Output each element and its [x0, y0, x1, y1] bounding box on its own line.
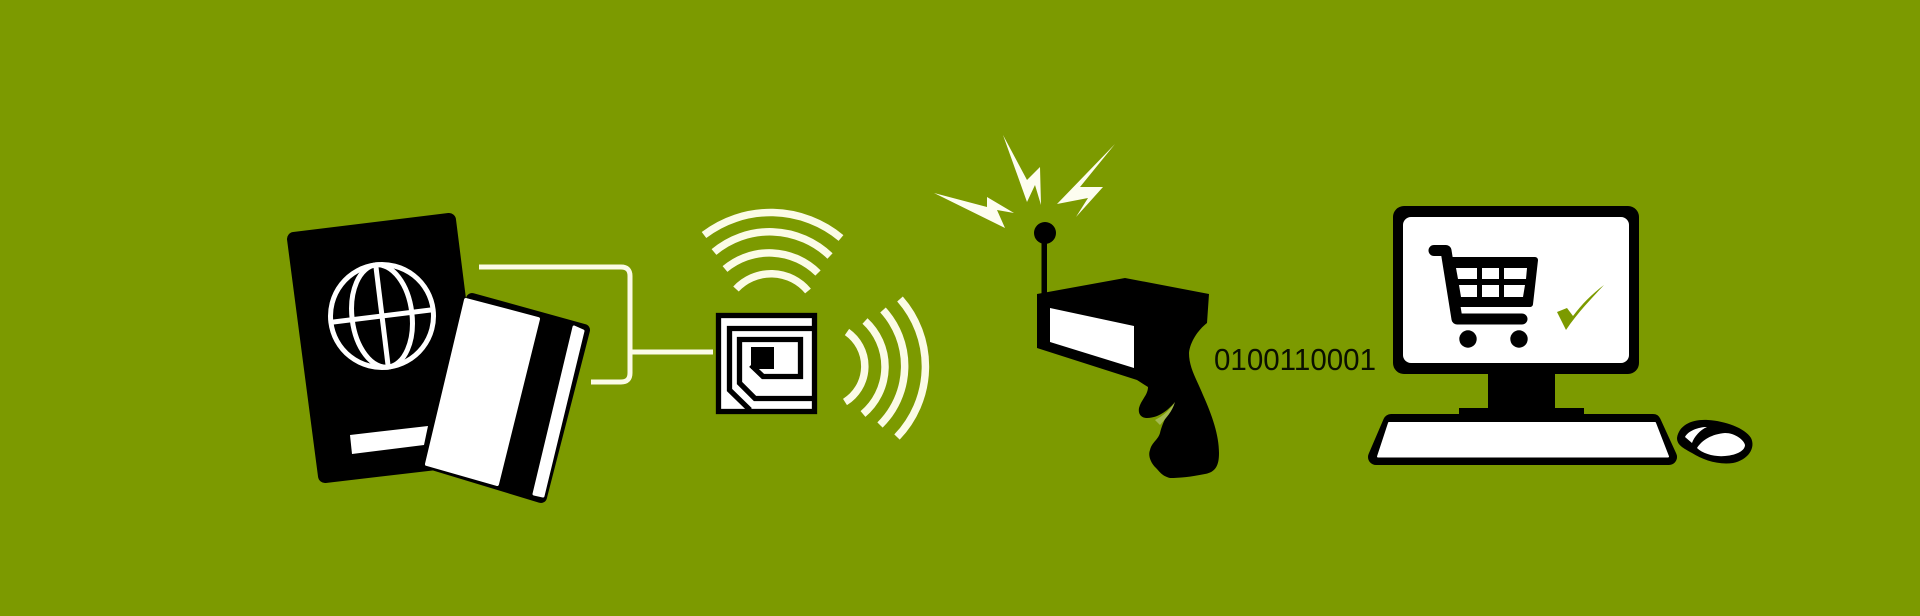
cart handle and frame	[1434, 250, 1522, 319]
monitor stand	[1459, 370, 1584, 418]
card white face	[427, 300, 538, 484]
scanner trigger highlight	[1155, 402, 1175, 425]
cart wheels	[1459, 330, 1528, 348]
icon: signal waves upward	[704, 213, 841, 291]
icon: computer	[1376, 206, 1669, 457]
card body	[429, 299, 584, 497]
keyboard keys area	[1378, 423, 1668, 456]
icon: shopping cart	[1434, 250, 1535, 348]
keyboard	[1376, 422, 1669, 457]
chip core	[751, 347, 774, 369]
keyboard frame	[1376, 422, 1669, 457]
scanner body	[1037, 278, 1219, 478]
chip inner antenna coil	[740, 340, 812, 398]
mouse body	[1677, 420, 1752, 463]
connector bracket	[479, 267, 713, 382]
icon: bank card	[427, 299, 584, 497]
icon: passport	[294, 220, 479, 476]
monitor screen	[1403, 217, 1629, 363]
scanner window	[1050, 308, 1134, 368]
passport cover	[294, 220, 479, 476]
icon: RFID chip	[718, 316, 814, 412]
icon: barcode scanner	[1034, 222, 1219, 478]
passport globe	[325, 258, 440, 374]
passport label bar	[350, 426, 428, 454]
icon: signal waves rightward	[845, 299, 925, 437]
monitor frame	[1393, 206, 1639, 374]
mouse main button	[1697, 433, 1745, 456]
icon: check mark	[1557, 285, 1604, 330]
scanner antenna	[1034, 222, 1056, 297]
icon: mouse	[1677, 420, 1752, 463]
mouse side button	[1685, 427, 1707, 443]
cart basket	[1449, 260, 1535, 304]
cart basket grid	[1456, 268, 1527, 297]
chip outer antenna coil	[730, 328, 812, 410]
binary data text: 0100110001	[1214, 342, 1376, 377]
card signature strip	[534, 327, 583, 496]
icon: lightning bolts	[934, 135, 1115, 228]
chip frame	[718, 316, 814, 412]
